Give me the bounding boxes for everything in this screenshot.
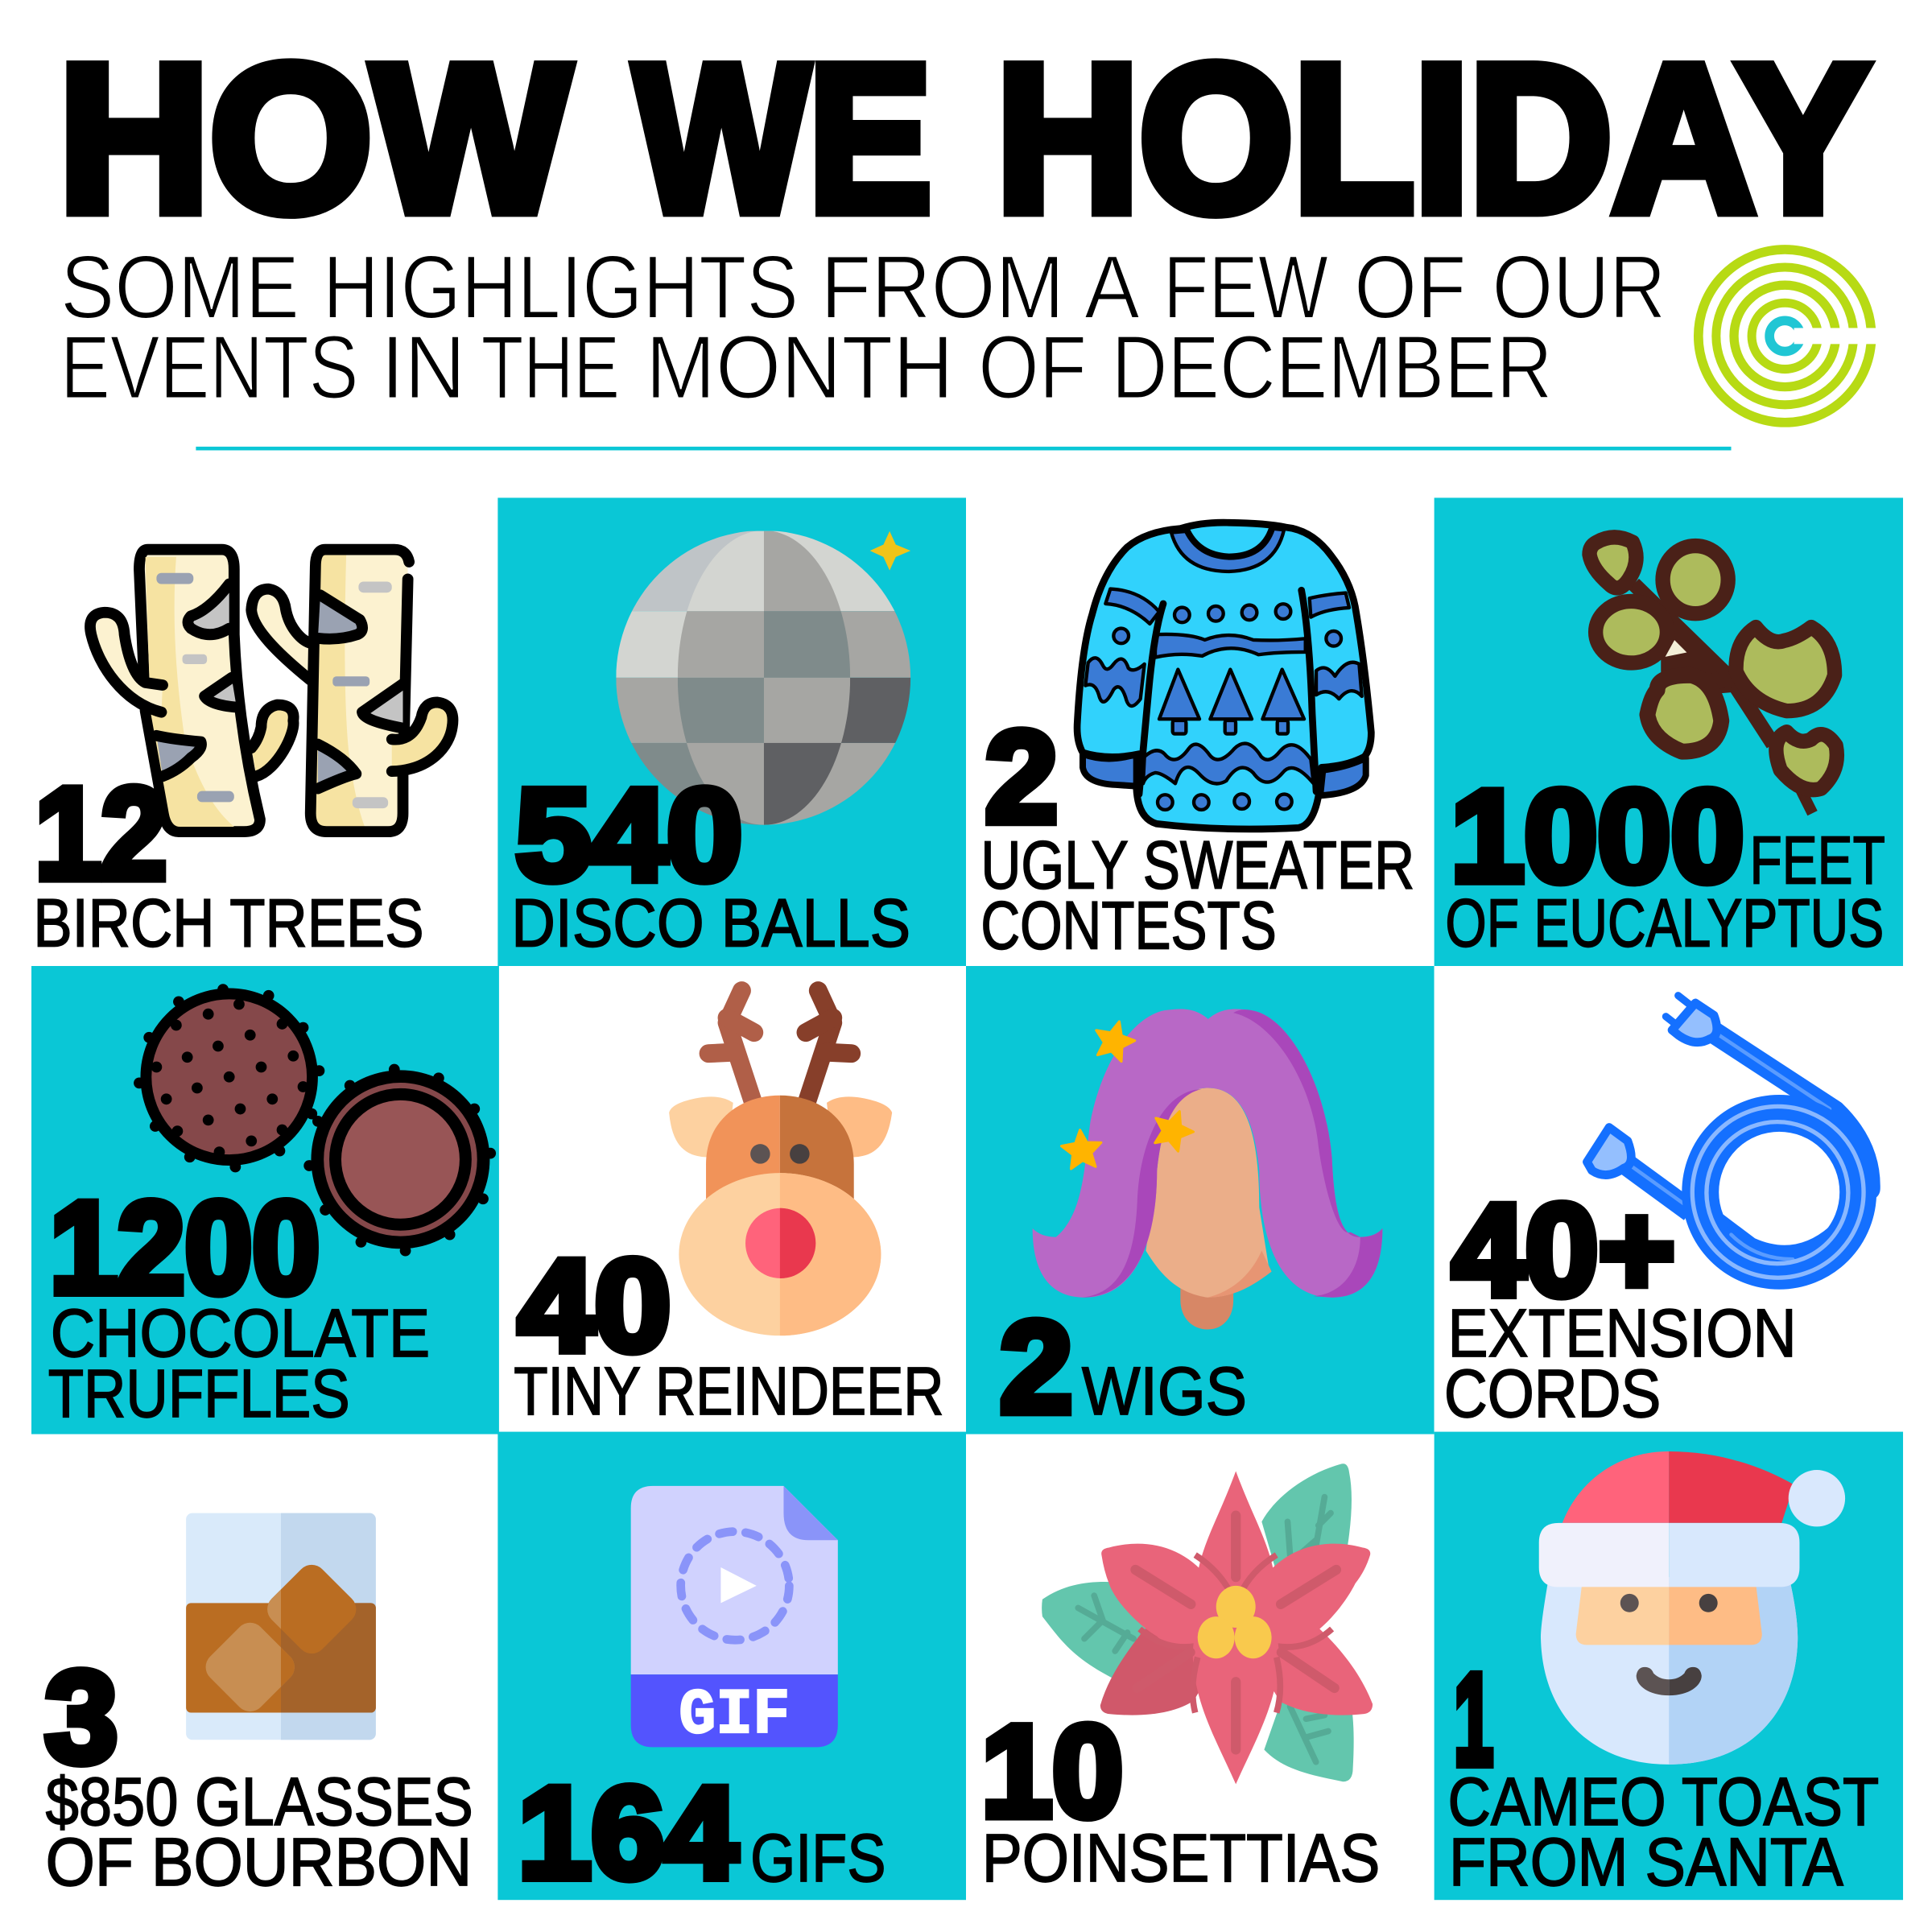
label: tiny reindeer: TINY REINDEER (514, 1353, 943, 1429)
icon: birch trees (90, 550, 452, 832)
label: wigs: WIGS (1082, 1353, 1247, 1429)
subtitle: DECEMBER (1112, 316, 1553, 417)
icon: bourbon glass (186, 1513, 376, 1740)
label: cameo toast from santa: CAMEO TOAST (1447, 1764, 1879, 1839)
subtitle: FROM (820, 237, 1064, 337)
panel: wigs (966, 966, 1435, 1440)
subtitle: SOME (60, 237, 299, 337)
number: 3: 3 (45, 1645, 118, 1790)
panel: tiny reindeer (499, 966, 966, 1435)
number: 12: 12 (35, 761, 167, 906)
panel: bourbon glasses (31, 1435, 497, 1901)
subtitle: MONTH (646, 316, 954, 417)
subtitle: OUR (1492, 237, 1666, 337)
icon: disco ball (616, 531, 912, 826)
icon: gif file: GIF (679, 1679, 790, 1752)
subtitle (60, 237, 1666, 417)
label: chocolate truffles: CHOCOLATE (51, 1295, 430, 1371)
label: cameo toast from santa: FROM SANTA (1449, 1824, 1843, 1900)
label: chocolate truffles (48, 1295, 430, 1431)
icon: eucalyptus branch (1589, 537, 1837, 813)
logo (1699, 250, 1880, 423)
subtitle: OF (1354, 237, 1466, 337)
subtitle: HIGHLIGHTS (323, 237, 799, 337)
subtitle: THE (481, 316, 620, 417)
number: 1000: 1000 (1451, 763, 1744, 909)
label: $850 glasses of bourbon: $850 GLASSES (46, 1764, 473, 1839)
title: HOW (59, 22, 572, 256)
panel: cameo toast from santa (1435, 1432, 1903, 1900)
subtitle: EVENTS (60, 316, 358, 417)
number: 40+: 40+ (1452, 1178, 1675, 1323)
panel: gifs (497, 1432, 966, 1906)
icon: gif file (631, 1486, 838, 1752)
icon: poinsettia (1042, 1463, 1373, 1784)
label: $850 glasses of bourbon: OF BOURBON (46, 1824, 472, 1900)
label: ugly sweater contests: UGLY SWEATER (980, 828, 1414, 903)
number: 2: 2 (985, 704, 1058, 850)
label: chocolate truffles: TRUFFLES (48, 1356, 350, 1431)
number: 164: 164 (518, 1761, 737, 1906)
panel: poinsettias (966, 1435, 1435, 1901)
number: 10: 10 (981, 1699, 1123, 1844)
panel: eucalyptus (1435, 497, 1903, 966)
title: WE (634, 22, 931, 256)
icon: santa (1539, 1451, 1845, 1765)
label: birch trees: BIRCH TREES (33, 886, 424, 961)
label: ugly sweater contests (980, 828, 1414, 964)
number: 40: 40 (518, 1233, 671, 1379)
label: gifs: GIFS (750, 1820, 886, 1896)
label: feet: FEET (1749, 822, 1885, 898)
label: cameo toast from santa (1447, 1764, 1879, 1900)
number: 1200: 1200 (50, 1175, 320, 1321)
icon: extension cord (1587, 996, 1869, 1278)
panel: birch trees (31, 497, 499, 966)
subtitle: FEW (1163, 237, 1328, 337)
label: poinsettias: POINSETTIAS (982, 1820, 1380, 1896)
subtitle: OF (978, 316, 1087, 417)
icon: truffles (134, 984, 496, 1256)
number: 1: 1 (1454, 1647, 1493, 1793)
number: 2: 2 (1000, 1294, 1072, 1440)
number: 540: 540 (516, 762, 742, 908)
subtitle: A (1084, 237, 1140, 337)
label: extension cords: CORDS (1444, 1356, 1661, 1431)
title: HOLIDAY (997, 22, 1869, 256)
icon: wig (1033, 1009, 1382, 1330)
panel: disco balls (497, 497, 966, 966)
icon: sweater (1077, 522, 1371, 829)
title (59, 22, 1869, 256)
label: extension cords: EXTENSION (1447, 1295, 1797, 1371)
subtitle: IN (381, 316, 466, 417)
panel: ugly sweaters (966, 497, 1435, 966)
icon: reindeer (669, 991, 892, 1335)
label: disco balls: DISCO BALLS (511, 886, 910, 961)
label: $850 glasses of bourbon (46, 1764, 473, 1900)
panel: extension cords (1435, 966, 1903, 1432)
panel: chocolate truffles (31, 966, 500, 1435)
label: ugly sweater contests: CONTESTS (980, 888, 1277, 964)
divider line (196, 447, 1732, 450)
label: extension cords (1444, 1295, 1797, 1431)
